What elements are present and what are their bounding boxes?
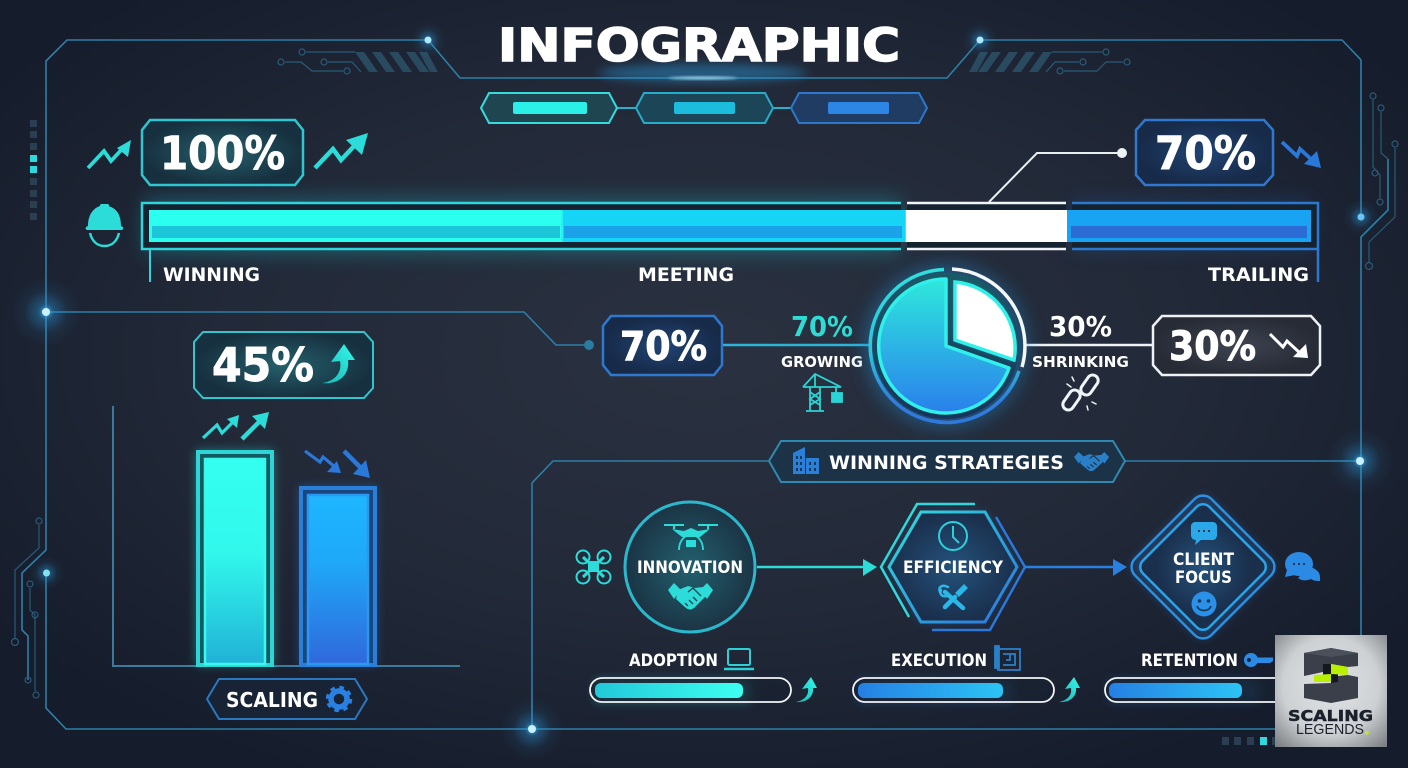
node: efficiency [881,504,1025,630]
icon: blueprint [995,646,1020,670]
callout leader line [989,148,1127,202]
badge: 100%: 100% [160,127,285,180]
arrow: execution up [1059,677,1080,702]
node: efficiency: EFFICIENCY [903,558,1004,577]
progress: retention [1105,678,1306,702]
node: innovation: INNOVATION [637,558,743,577]
panel: growing vs shrinking pie [584,266,1320,426]
heading: winning strategies: WINNING STRATEGIES [829,452,1064,474]
icon: tools [939,586,966,608]
icon: speech bubble [1191,522,1217,545]
icon: smile [1192,592,1216,616]
arrow: trend down [1282,142,1321,168]
progress bar: winning meeting trailing [142,198,1318,282]
icon: key [1244,653,1273,667]
label: scaling [207,679,367,719]
node: client focus: CLIENT [1173,550,1235,569]
label: adoption: ADOPTION [629,651,718,671]
chart axes [113,406,460,666]
arrow: trend up right [315,133,368,168]
badge: 30% right: 30% [1169,324,1256,370]
arrow: small trend up left [88,140,131,168]
node: client focus [1127,491,1279,643]
arrows: decline above bar [305,451,370,478]
label: meeting: MEETING [638,264,734,286]
bottom tick indicators [1222,737,1277,745]
badge: 45%: 45% [212,338,314,392]
value: 70% growing: 70% [791,310,853,343]
label: growing: GROWING [781,353,863,371]
panel: winning strategies [576,441,1320,702]
label: shrinking: SHRINKING [1032,353,1129,371]
left side tick indicators [30,120,37,220]
icon: drone [664,525,718,550]
node: client focus: FOCUS [1175,568,1232,587]
badge: 70% left [603,316,722,375]
badge: 45% [194,332,373,398]
progress: execution [853,678,1054,702]
arrow: adoption up [796,677,817,702]
label: winning: WINNING [163,264,260,286]
connector line white [1024,344,1153,346]
top chips: three segment indicators [481,93,927,123]
badge: 70% left: 70% [620,324,707,370]
badge: 70% top [1136,120,1273,185]
bar: decline blue [299,486,377,665]
icon: laptop [724,649,754,669]
logo: scaling legends: LEGENDS [1296,721,1364,738]
arrow: efficiency to client focus [1025,559,1127,576]
icon: crane [803,374,842,411]
arrows: growth above bar [203,412,269,439]
icon: clock [939,522,967,550]
arrow: innovation to efficiency [757,559,877,576]
connector dot [584,340,594,350]
icon: hard hat [86,204,123,246]
label: trailing: TRAILING [1208,264,1309,286]
logo: scaling legends [1275,635,1387,747]
label: scaling: SCALING [226,688,318,712]
label: retention: RETENTION [1141,651,1238,671]
badge: 70% top: 70% [1155,127,1256,180]
panel: scaling bar chart [113,332,460,719]
pie chart [866,266,1026,426]
icon: handshake [668,583,713,610]
node: innovation [625,502,755,632]
heading: winning strategies [769,441,1125,482]
logo: scaling legends: SCALING [1288,707,1373,725]
label: execution: EXECUTION [891,651,987,671]
icon: quadcopter [576,550,610,584]
progress: adoption [590,678,791,702]
value: 30% shrinking: 30% [1049,310,1112,343]
icon: chat bubbles [1285,552,1320,581]
connector lines [722,344,870,346]
badge: 30% right [1153,316,1320,375]
icon: broken chain [1061,373,1100,412]
bar: growth cyan [196,450,274,665]
title: INFOGRAPHIC [498,19,900,72]
